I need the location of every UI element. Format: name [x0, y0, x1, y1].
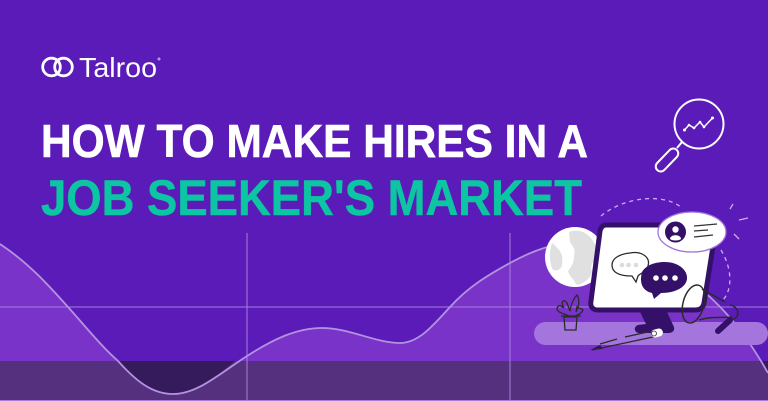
illustration: desk with monitor — [534, 199, 768, 350]
spark lines — [730, 204, 748, 239]
desk shelf — [534, 322, 768, 345]
title line 2: JOB SEEKER'S MARKET — [41, 170, 582, 226]
icon: magnifying glass with trend line — [654, 100, 724, 174]
logo wordmark: Talroo — [79, 52, 157, 83]
logo: Talroo — [43, 52, 161, 83]
icon: potted plant — [557, 295, 583, 330]
dashed orbit arc — [601, 199, 730, 300]
icon: megaphone — [678, 282, 738, 331]
icon: interlocking rings — [43, 58, 72, 76]
outline chat bubble — [612, 253, 649, 282]
icon: pencil — [590, 328, 664, 350]
profile bubble — [658, 212, 726, 252]
title — [41, 115, 588, 226]
globe — [545, 227, 605, 287]
title line 1: HOW TO MAKE HIRES IN A — [41, 115, 588, 167]
monitor — [591, 225, 715, 310]
monitor stand — [635, 310, 674, 333]
wave chart background — [0, 233, 768, 401]
dark chat bubble — [641, 262, 687, 299]
